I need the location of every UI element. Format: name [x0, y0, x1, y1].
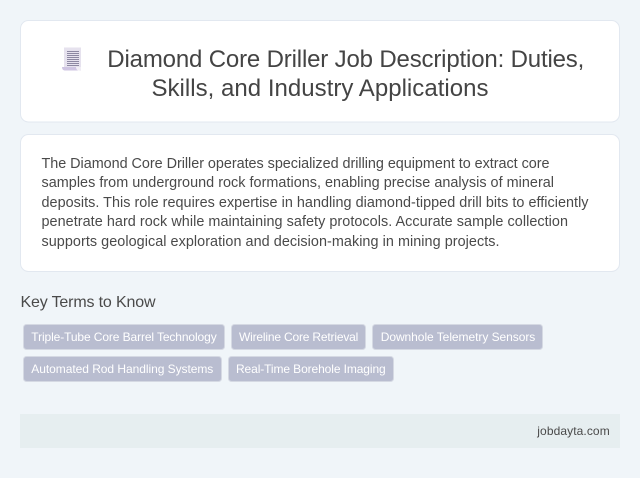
tag: downhole telemetry: Downhole Telemetry Sensors [381, 330, 535, 344]
panel: key term tags [24, 324, 542, 382]
tag: borehole imaging [228, 356, 394, 382]
description text: penetrate hard rock while maintaining safety protocols. Accurate sample collection [42, 214, 568, 230]
title [107, 46, 584, 102]
heading: key terms: Key Terms to Know [20, 294, 156, 311]
panel: description card [20, 134, 620, 272]
tag: wireline [232, 324, 366, 350]
description text: samples from underground rock formations, enabling precise analysis of mineral [42, 175, 554, 191]
description text: The Diamond Core Driller operates specialized drilling equipment to extract core [42, 156, 550, 172]
tag: wireline: Wireline Core Retrieval [239, 330, 358, 344]
title: Diamond Core Driller Job Description: Duties, [107, 46, 584, 73]
description text [42, 156, 589, 250]
icon: document scroll [62, 48, 81, 70]
tag: borehole imaging: Real-Time Borehole Imaging [236, 362, 386, 376]
title: Skills, and Industry Applications [152, 75, 488, 102]
tag: automated rod handling [24, 356, 222, 382]
panel: title card [20, 20, 620, 122]
tag: automated rod handling: Automated Rod Handling Systems [31, 362, 213, 376]
footer site name: jobdayta.com [536, 424, 610, 438]
description text: deposits. This role requires expertise in handling diamond-tipped drill bits to efficiently [42, 195, 589, 211]
tag: triple-tube [24, 324, 224, 350]
description text: supports geological exploration and decision-making in mining projects. [42, 234, 500, 250]
footer bar [20, 414, 620, 448]
tag: triple-tube: Triple-Tube Core Barrel Technology [31, 330, 217, 344]
tag: downhole telemetry [372, 324, 542, 350]
